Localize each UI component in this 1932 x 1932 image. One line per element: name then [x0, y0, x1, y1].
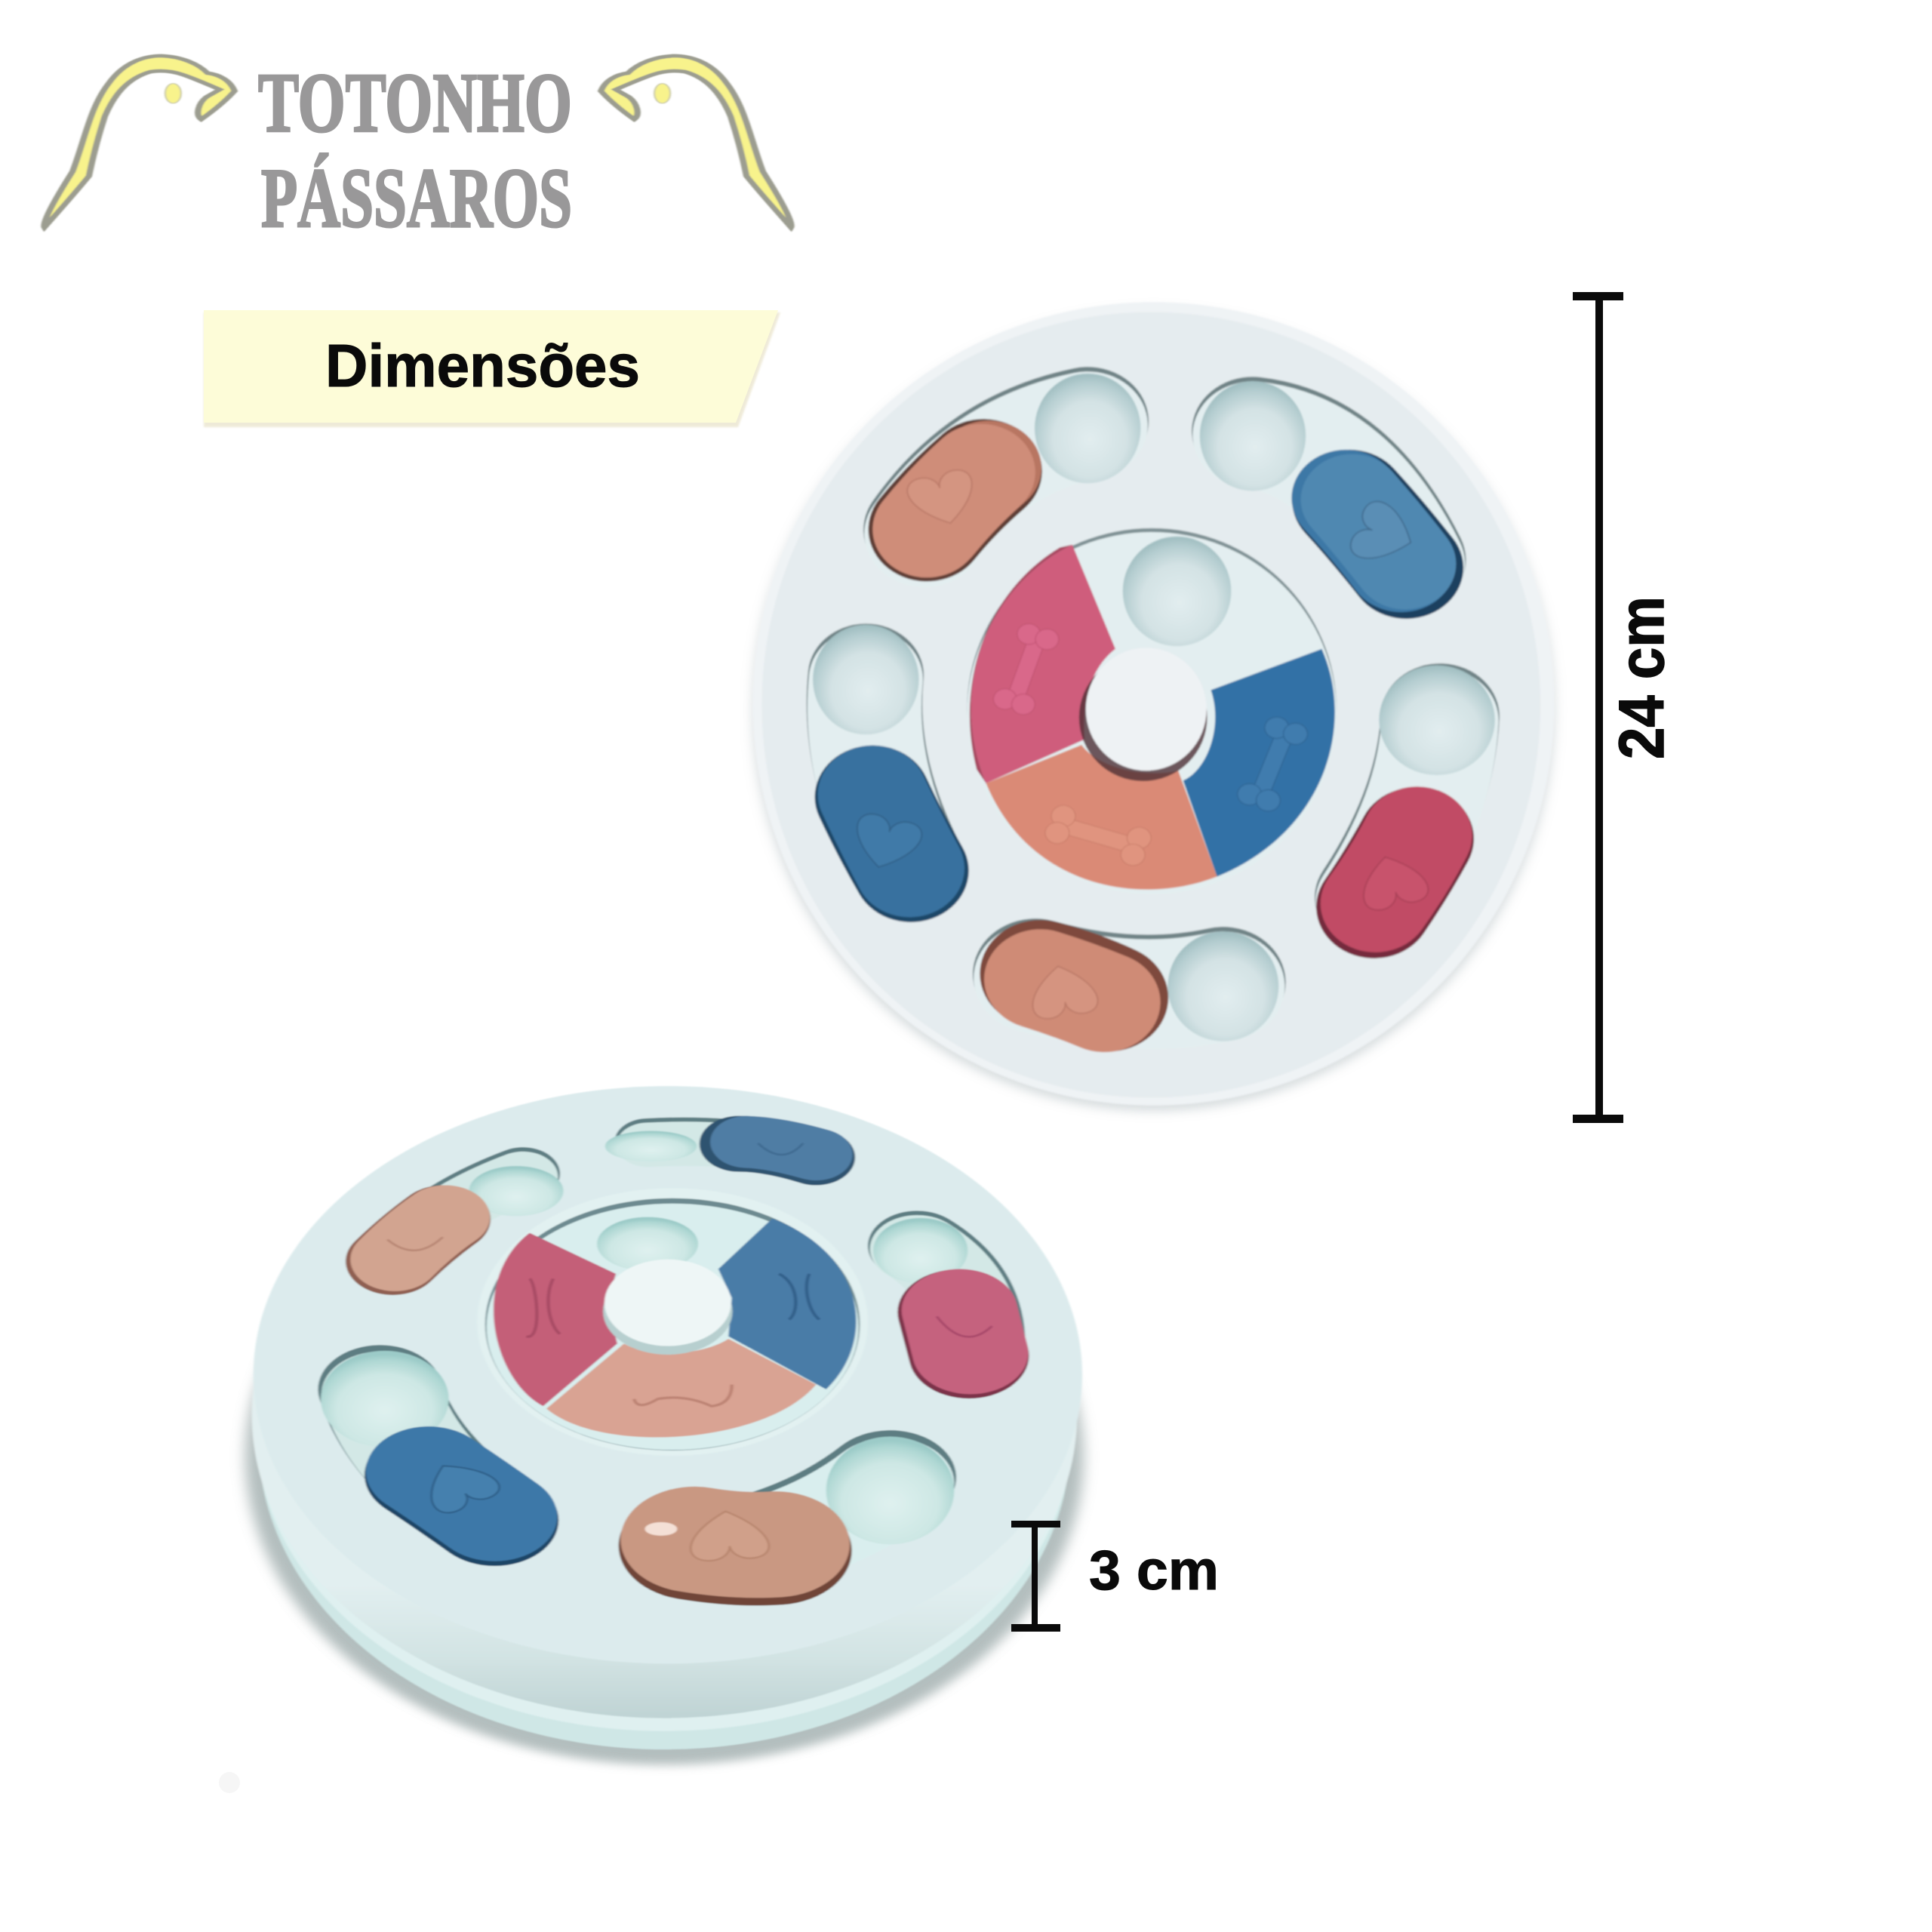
- sector: blue with bone: [718, 1219, 857, 1389]
- slot: top left with salmon piece: [388, 1166, 563, 1263]
- icon: left bird outline: [44, 56, 235, 227]
- slot: bottom with salmon piece: [645, 1436, 954, 1562]
- dimension line: 24 cm: [1573, 292, 1677, 1123]
- centre hub: [1079, 648, 1208, 781]
- sector: pink with bone: [970, 545, 1115, 783]
- slot: left with blue piece: [813, 625, 924, 875]
- logo: Totonho Pássaros: [44, 56, 792, 245]
- sector: pink with bone: [494, 1233, 617, 1406]
- slot: top with blue piece: [605, 1131, 816, 1161]
- icon: right bird outline: [601, 56, 792, 227]
- label: 24 cm: 24 cm: [1606, 596, 1677, 759]
- slot: right with red piece: [1353, 666, 1495, 913]
- label: 3 cm: 3 cm: [1089, 1539, 1219, 1601]
- slot: left with blue piece: [321, 1351, 505, 1520]
- centre recess with bowl: [967, 528, 1337, 894]
- sector: blue with bone: [1183, 649, 1335, 877]
- slot: bottom with salmon piece: [1026, 931, 1278, 1041]
- logo text line 1: TOTONHO: [258, 57, 572, 150]
- heading text: Dimensões: [325, 332, 640, 399]
- product: side view of puzzle disc: [245, 1086, 1084, 1764]
- faint speck: [219, 1772, 240, 1793]
- logo text line 2: PÁSSAROS: [261, 152, 572, 245]
- sector: salmon with bone: [546, 1339, 816, 1437]
- slot: top left with salmon piece: [904, 374, 1140, 534]
- sector: salmon with bone: [986, 745, 1217, 890]
- product: top view of puzzle disc: [753, 302, 1554, 1111]
- slot: top right with blue piece: [1200, 381, 1422, 570]
- heading banner: Dimensões: [204, 310, 780, 427]
- centre hub: [603, 1260, 733, 1355]
- centre recess with bowl: [477, 1188, 868, 1456]
- slot: right with red piece: [873, 1218, 991, 1358]
- dimension line: 3 cm: [1011, 1521, 1219, 1632]
